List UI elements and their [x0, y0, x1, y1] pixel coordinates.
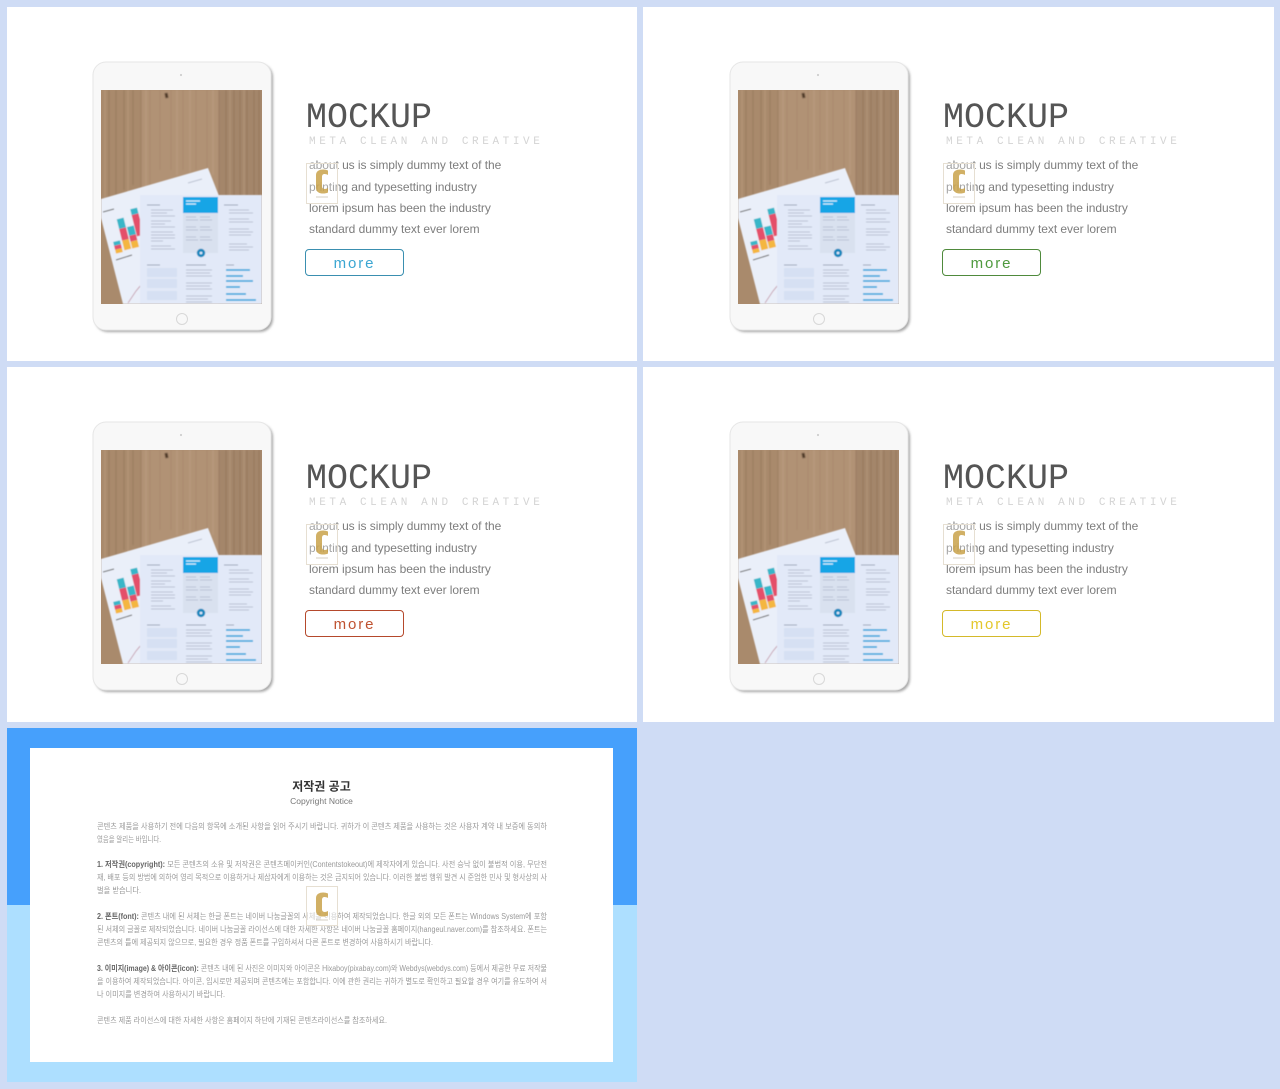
heading: MOCKUP: MOCKUP	[306, 98, 432, 138]
icon: watermark logo	[943, 163, 975, 204]
text block: section 2 font	[97, 911, 548, 947]
body text: about us is simply dummy text of the	[946, 519, 1138, 533]
text block: section 3 image and icon: 을 이용하여 제작되었습니다. 아이콘, 임시로만 제공되며 콘텐츠에는 포함합니다. 이에 관한 권리는 귀하가 별도로 확인하고 필요할 경우 여기를 유도하여 서	[97, 976, 547, 986]
body text: lorem ipsum has been the industry	[309, 562, 491, 576]
panel: mockup slide green	[643, 7, 1274, 361]
body text: standard dummy text ever lorem	[946, 222, 1117, 236]
body text: printing and typesetting industry	[946, 541, 1114, 555]
subheading: META CLEAN AND CREATIVE	[946, 136, 1180, 148]
text block: section 3 image and icon: 3. 이미지(image) & 아이콘(icon): 콘텐츠 내에 된 사진은 이미지와 아이콘은 Hixaboy(pixabay.com)와 Webdys(webdys.com) 등에서 제공한 무료 저작물	[97, 963, 547, 973]
text block: section 1 copyright: 1. 저작권(copyright): 모든 콘텐츠의 소유 및 저작권은 콘텐츠메이커인(Contentstokeout)에 제작자에게 있습니다. 사전 승낙 없이 불법적 이용, 무단전	[97, 859, 547, 869]
button: more: more	[334, 616, 375, 633]
text block: introduction: 였음을 알리는 바입니다.	[97, 834, 161, 844]
body text: standard dummy text ever lorem	[309, 583, 480, 597]
text block: section 3 image and icon: 나 이미지를 변경하여 사용하시기 바랍니다.	[97, 989, 225, 999]
icon: tablet mockup	[730, 422, 912, 694]
panel: copyright notice	[7, 728, 637, 1082]
body text: printing and typesetting industry	[309, 180, 477, 194]
body text: about us is simply dummy text of the	[309, 519, 501, 533]
button: more: more	[971, 616, 1012, 633]
panel: mockup slide red	[7, 367, 637, 722]
body text: printing and typesetting industry	[946, 180, 1114, 194]
heading: MOCKUP: MOCKUP	[306, 459, 432, 499]
text block: section 1 copyright	[97, 859, 548, 895]
text block: section 2 font: 2. 폰트(font): 콘텐츠 내에 된 서체는 한글 폰트는 네이버 나눔글꼴의 서체를 이용하여 제작되었습니다. 한글 외의 모든 폰트는 Windows System에 포함	[97, 911, 548, 921]
button: more: more	[334, 255, 375, 272]
body text	[946, 158, 1138, 236]
body text	[309, 158, 501, 236]
panel: mockup slide blue	[7, 7, 637, 361]
text block: section 2 font: 콘텐츠의 틀에 제공되지 않으므로, 필요한 경우 정품 폰트를 구입하셔서 다른 폰트로 변경하여 사용하시기 바랍니다.	[97, 937, 433, 947]
icon: watermark logo	[306, 886, 338, 926]
button: more: more	[971, 255, 1012, 272]
text block: section 3 image and icon	[97, 963, 547, 999]
body text	[946, 519, 1138, 597]
subheading: META CLEAN AND CREATIVE	[309, 136, 543, 148]
icon: tablet mockup	[730, 62, 912, 334]
body text: standard dummy text ever lorem	[946, 583, 1117, 597]
panel: mockup slide yellow	[643, 367, 1274, 722]
text block: introduction	[97, 821, 548, 844]
icon: watermark logo	[306, 163, 338, 204]
icon: tablet mockup	[92, 62, 274, 334]
body text: lorem ipsum has been the industry	[309, 201, 491, 215]
button: more	[942, 610, 1041, 637]
body text: standard dummy text ever lorem	[309, 222, 480, 236]
body text: lorem ipsum has been the industry	[946, 201, 1128, 215]
subheading: Copyright Notice: Copyright Notice	[290, 796, 353, 806]
text block: section 2 font: 된 서체의 글꼴로 제작되었습니다. 네이버 나눔글꼴 라이선스에 대한 자세한 사항은 네이버 나눔글꼴 홈페이지(hangeul.naver.com)를 참조하세요. 폰트는	[97, 924, 547, 934]
body text: about us is simply dummy text of the	[946, 158, 1138, 172]
subheading: META CLEAN AND CREATIVE	[946, 497, 1180, 509]
icon: watermark logo	[306, 524, 338, 565]
button: more	[305, 610, 404, 637]
subheading: META CLEAN AND CREATIVE	[309, 497, 543, 509]
text block: license note: 콘텐츠 제품 라이선스에 대한 자세한 사항은 홈페이지 하단에 기재된 콘텐츠라이선스를 참조하세요.	[97, 1015, 387, 1025]
body text: about us is simply dummy text of the	[309, 158, 501, 172]
body text	[309, 519, 501, 597]
icon: watermark logo	[943, 524, 975, 565]
heading: copyright title: 저작권 공고	[292, 778, 351, 794]
body text: lorem ipsum has been the industry	[946, 562, 1128, 576]
icon: tablet mockup	[92, 422, 274, 694]
button: more	[305, 249, 404, 276]
heading: MOCKUP: MOCKUP	[943, 459, 1069, 499]
button: more	[942, 249, 1041, 276]
text block: section 1 copyright: 재, 배포 등의 방법에 의하여 영리 목적으로 이용하거나 제삼자에게 이용하는 것은 금지되어 있습니다. 이러한 불법 행위 발견 시 준엄한 민사 및 형사상의 사	[97, 872, 548, 882]
heading: MOCKUP: MOCKUP	[943, 98, 1069, 138]
text block: section 1 copyright: 벌을 받습니다.	[97, 885, 141, 895]
text block: introduction: 콘텐츠 제품을 사용하기 전에 다음의 항목에 소개된 사항을 읽어 주시기 바랍니다. 귀하가 이 콘텐츠 제품을 사용하는 것은 사용자 계약 내 보증에 동의하	[97, 821, 548, 831]
body text: printing and typesetting industry	[309, 541, 477, 555]
